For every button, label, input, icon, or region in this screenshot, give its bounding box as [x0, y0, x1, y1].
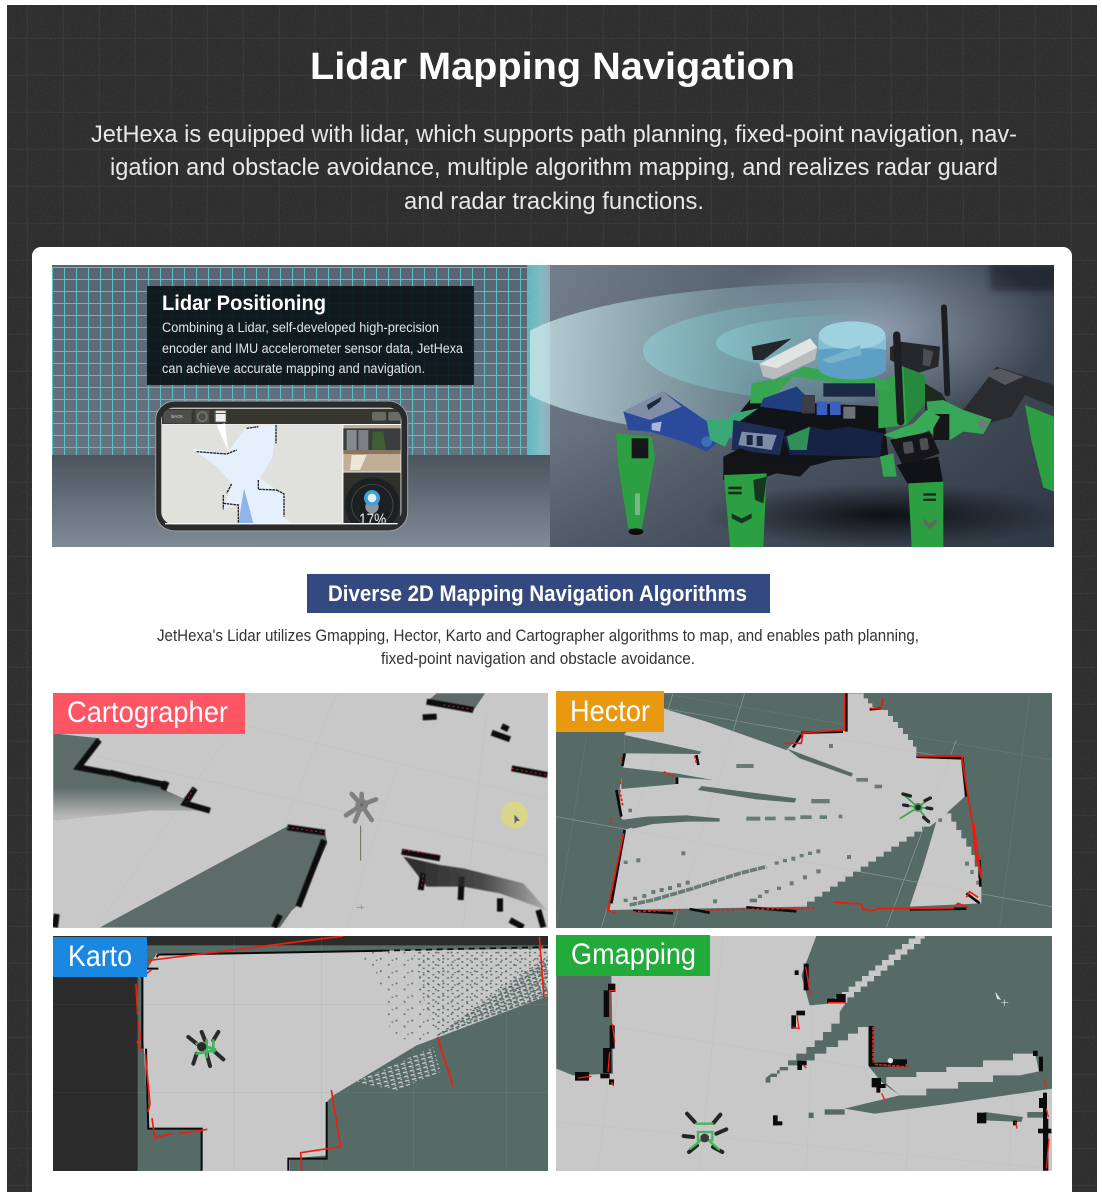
intro paragraph: and radar tracking functions. — [404, 188, 704, 215]
app joystick — [343, 472, 401, 523]
caption body: encoder and IMU accelerometer sensor data, JetHexa — [162, 341, 463, 356]
main title: Lidar Mapping Navigation — [310, 46, 795, 88]
caption body: can achieve accurate mapping and navigation. — [162, 361, 425, 376]
section heading: algorithms: Diverse 2D Mapping Navigation Algorithms — [328, 581, 747, 606]
label: Hector: Hector — [570, 695, 650, 728]
label: Gmapping: Gmapping — [571, 938, 696, 971]
robot marker — [346, 794, 376, 821]
app map — [162, 423, 342, 523]
phone showing mapping app — [155, 401, 408, 532]
intro paragraph — [91, 121, 1017, 215]
label: Hector — [556, 691, 664, 732]
section description — [157, 626, 919, 668]
robot marker — [900, 794, 932, 823]
camera module — [752, 338, 817, 379]
section description: JetHexa's Lidar utilizes Gmapping, Hector, Karto and Cartographer algorithms to map, and enables path planning, — [157, 626, 919, 645]
section description: fixed-point navigation and obstacle avoidance. — [381, 649, 695, 668]
legs — [616, 432, 943, 547]
caption body: Combining a Lidar, self-developed high-precision — [162, 320, 439, 335]
label: Karto — [53, 937, 147, 977]
sonar waves — [530, 283, 880, 438]
panel: Hector map — [553, 690, 1053, 930]
caption heading: Lidar Positioning — [162, 292, 326, 315]
label: Karto: Karto — [68, 940, 132, 973]
panel: Cartographer map — [50, 690, 550, 930]
caption body — [162, 320, 463, 376]
lidar positioning caption box — [147, 286, 474, 385]
left raised leg with scan tint — [623, 392, 758, 452]
app camera view — [343, 425, 401, 472]
lidar cylinder — [818, 321, 886, 379]
robot marker — [684, 1114, 726, 1152]
section heading: algorithms — [307, 574, 770, 613]
robot: JetHexa hexapod — [616, 307, 1054, 547]
label: Cartographer: Cartographer — [67, 696, 228, 729]
floor shadow under robot — [721, 487, 1040, 542]
panel: lidar positioning banner — [52, 265, 1054, 547]
panel: Karto map — [50, 932, 550, 1175]
white content card — [32, 247, 1072, 1192]
phone bezel — [156, 401, 408, 531]
phone showing mapping app: BACK — [171, 414, 183, 419]
app joystick: 17% — [359, 510, 386, 530]
antennas — [897, 307, 947, 422]
panel: Gmapping map — [553, 932, 1053, 1175]
intro paragraph: JetHexa is equipped with lidar, which supports path planning, fixed-point navigation, nav- — [91, 121, 1017, 148]
ports — [802, 383, 875, 419]
robot marker — [188, 1032, 223, 1066]
intro paragraph: igation and obstacle avoidance, multiple algorithm mapping, and realizes radar guard — [110, 154, 998, 181]
